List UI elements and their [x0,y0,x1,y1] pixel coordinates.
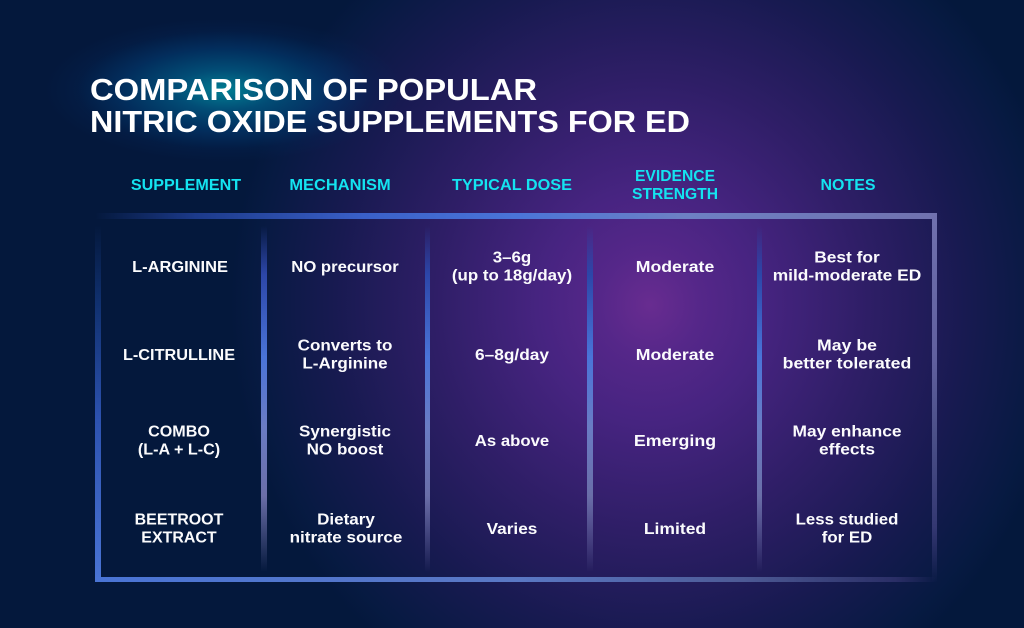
row 4: mechanism: nitrate source [289,530,402,547]
title: NITRIC OXIDE SUPPLEMENTS FOR ED [90,105,690,139]
header: evidence strength: STRENGTH [632,186,718,203]
row 1: supplement: L-ARGININE [132,259,227,276]
header: supplement: SUPPLEMENT [130,176,241,194]
title [90,73,690,139]
row 3: supplement: (L-A + L-C) [138,442,220,459]
row 2: mechanism [298,338,392,373]
row 4: supplement: BEETROOT [135,512,223,529]
row 2: notes [783,338,911,373]
row 2: notes: May be [817,338,877,355]
row 2: mechanism: Converts to [298,338,392,355]
row 2: mechanism: L-Arginine [302,356,388,373]
row 3: notes: effects [819,442,875,459]
row 4: evidence: Limited [644,521,706,538]
row 4: mechanism: Dietary [317,512,374,529]
table frame [95,213,937,582]
row 3: notes [792,424,902,459]
row 4: notes [796,512,898,547]
row 3: dose: As above [475,433,549,450]
row 1: notes: Best for [814,250,880,267]
row 1: mechanism: NO precursor [291,259,399,276]
row 1: dose: 3–6g [493,250,531,267]
row 2: notes: better tolerated [783,356,911,373]
header: evidence strength: EVIDENCE [635,168,715,185]
header: mechanism: MECHANISM [289,176,391,194]
row 3: mechanism: Synergistic [299,424,391,441]
row 4: mechanism [289,512,402,547]
row 3: supplement [138,424,220,459]
row 4: supplement [135,512,224,547]
row 3: mechanism: NO boost [307,442,383,459]
row 3: evidence: Emerging [634,433,716,450]
row 4: supplement: EXTRACT [141,530,217,547]
row 1: notes: mild-moderate ED [773,268,921,285]
row 3: notes: May enhance [792,424,902,441]
header: notes: NOTES [820,176,875,194]
header: typical dose: TYPICAL DOSE [452,176,572,194]
row 2: dose: 6–8g/day [475,347,549,364]
row 1: evidence: Moderate [636,259,714,276]
row 1: dose [452,250,572,285]
row 3: mechanism [299,424,391,459]
row 4: notes: for ED [822,530,872,547]
row 1: dose: (up to 18g/day) [452,268,572,285]
row 3: supplement: COMBO [148,424,210,441]
title: COMPARISON OF POPULAR [90,73,537,107]
row 4: dose: Varies [487,521,537,538]
row 2: supplement: L-CITRULLINE [123,347,235,364]
row 4: notes: Less studied [796,512,898,529]
row 1: notes [773,250,921,285]
header: evidence strength [632,168,718,203]
row 2: evidence: Moderate [636,347,714,364]
